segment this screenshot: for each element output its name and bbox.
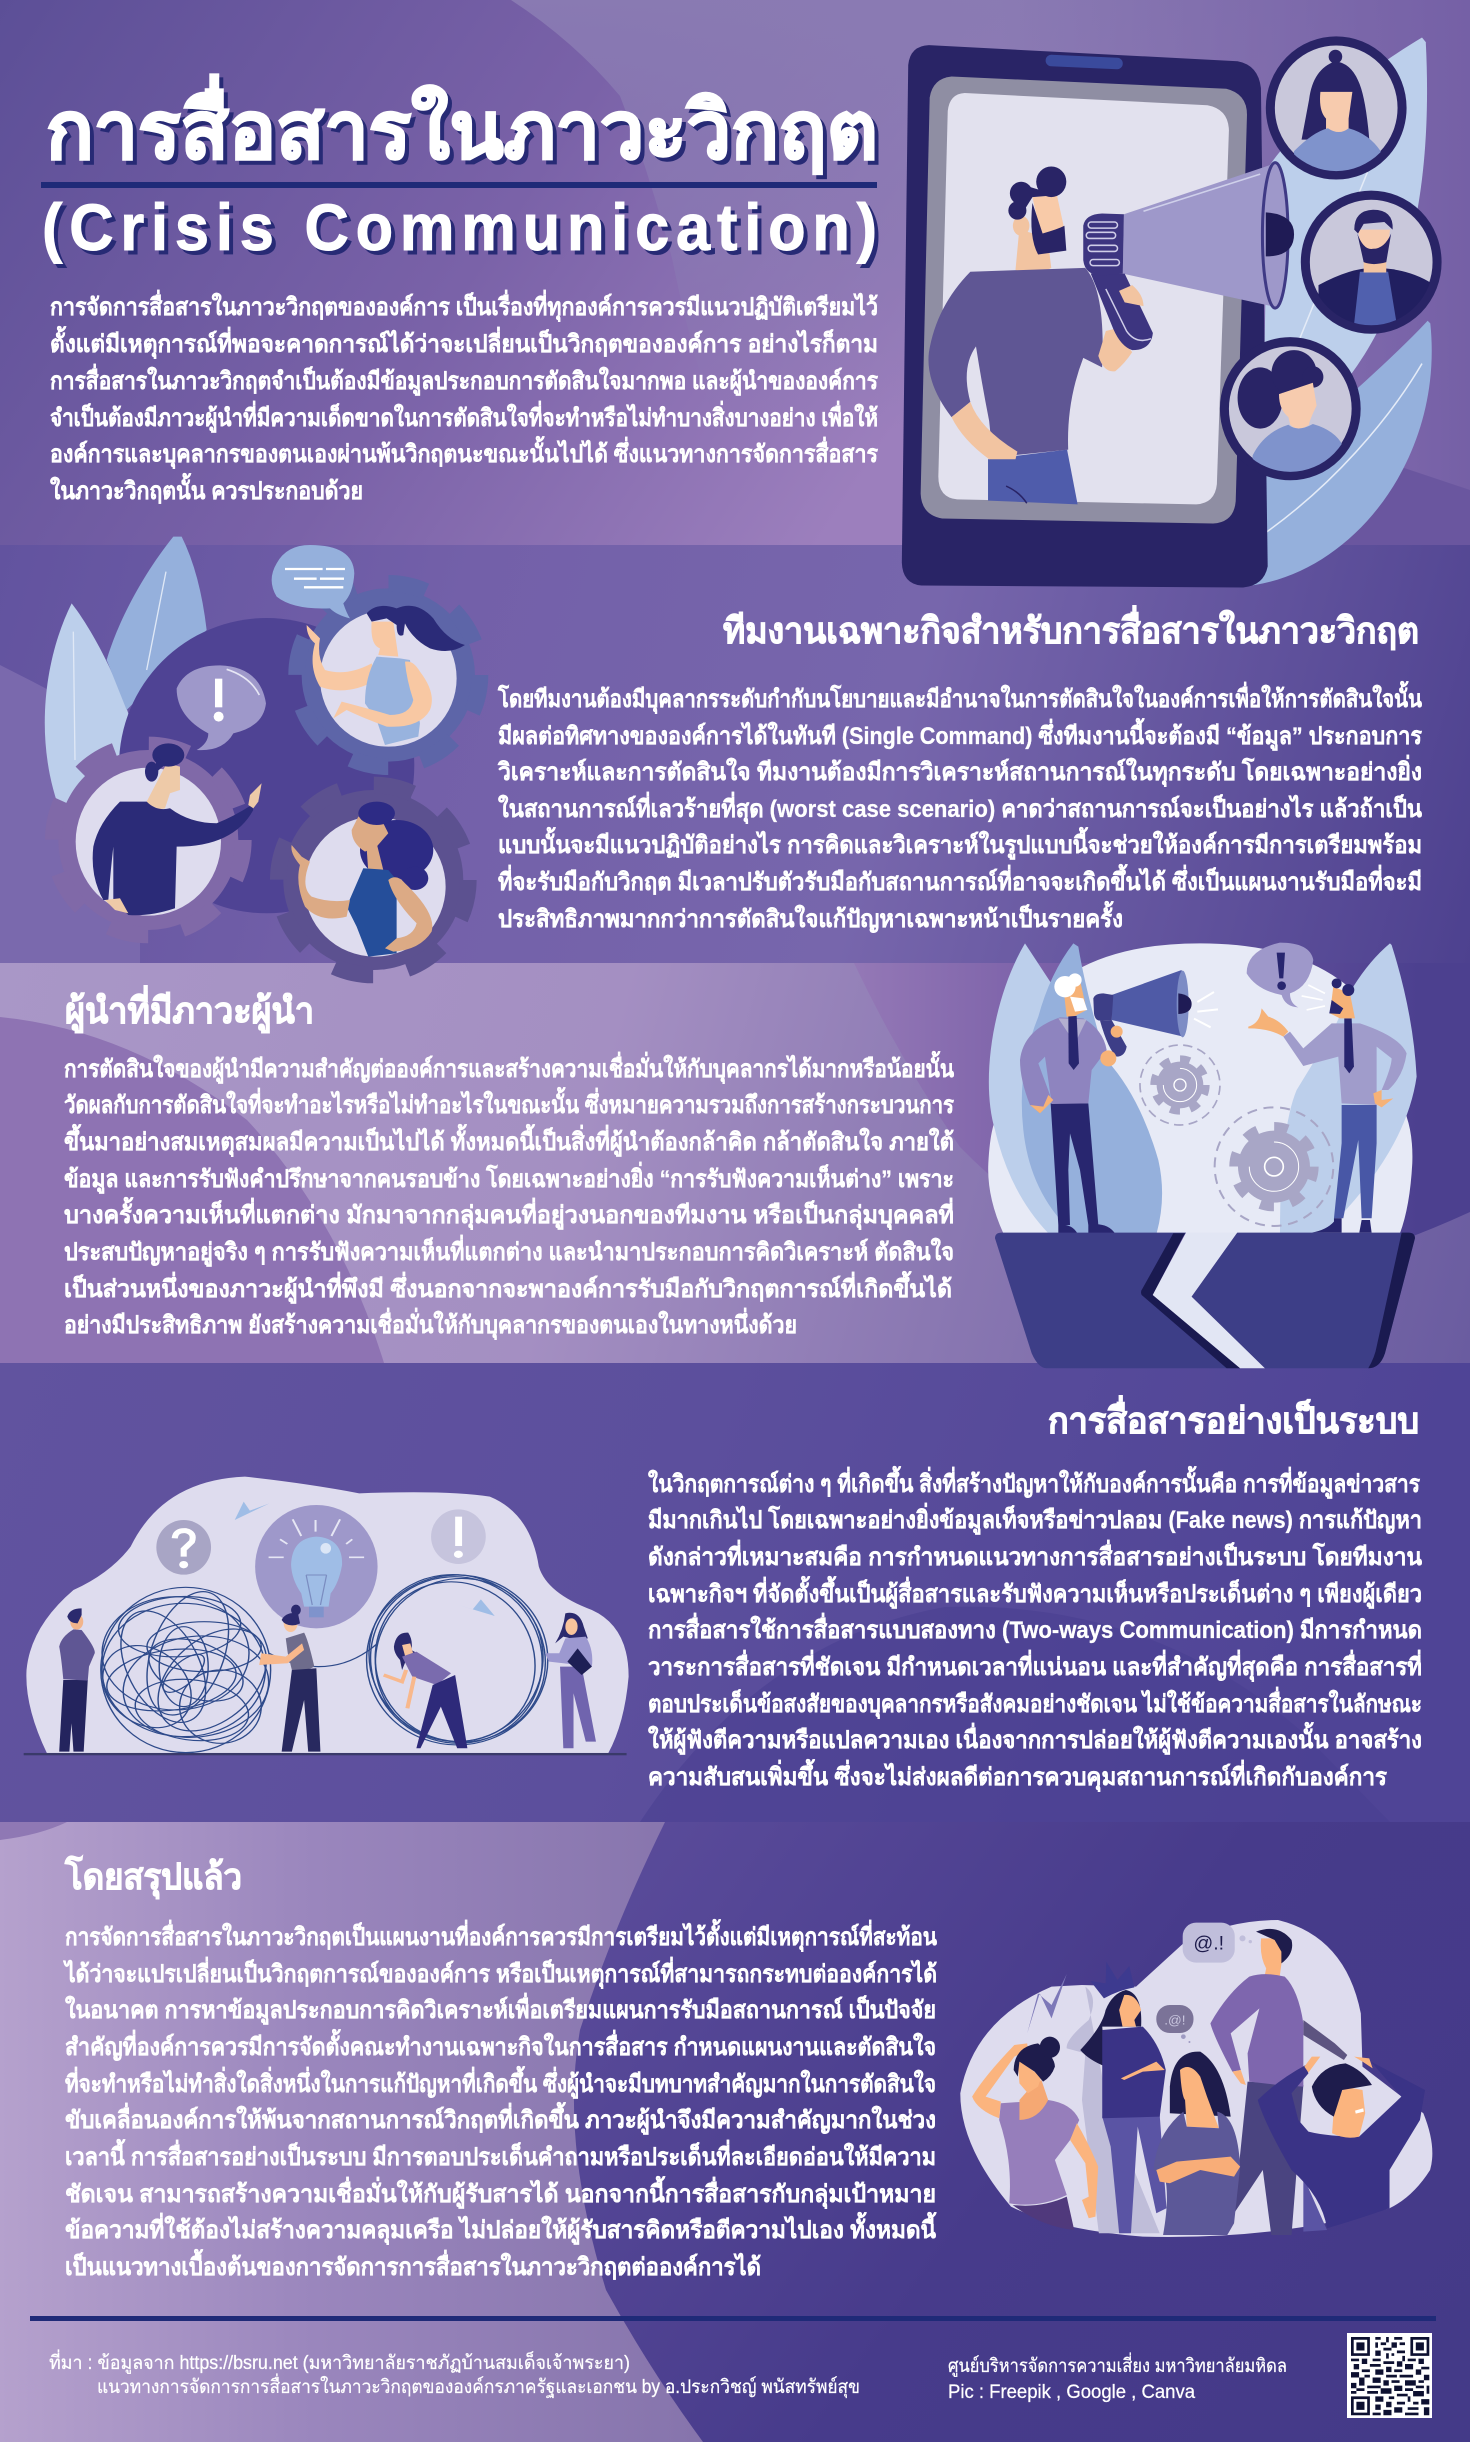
leadership text: อย่างมีประสิทธิภาพ ยังสร้างความเชื่อมั่นให้กับบุคลากรของตนเองในทางหนึ่งด้วย [64, 1307, 797, 1341]
team text: ประสิทธิภาพมากกว่าการตัดสินใจแก้ปัญหาเฉพาะหน้าเป็นรายครั้ง [498, 900, 1123, 933]
systematic text: วาระการสื่อสารที่ชัดเจน มีกำหนดเวลาที่แน่นอน และที่สำคัญที่สุดคือ การสื่อสารที่ [648, 1649, 1422, 1683]
person: woman pulling thread [259, 1605, 320, 1752]
credit text: ศูนย์บริหารจัดการความเสี่ยง มหาวิทยาลัยมหิดล [948, 2352, 1287, 2377]
systematic text: การสื่อสารใช้การสื่อสารแบบสองทาง (Two-ways Communication) มีการกำหนด [648, 1612, 1422, 1644]
title [42, 74, 878, 264]
intro text: ตั้งแต่มีเหตุการณ์ที่พอจะคาดการณ์ได้ว่าจะเปลี่ยนเป็นวิกฤตขององค์การ อย่างไรก็ตาม [50, 325, 878, 360]
intro text: การจัดการสื่อสารในภาวะวิกฤตขององค์การ เป็นเรื่องที่ทุกองค์การควรมีแนวปฏิบัติเตรียมไว้ [50, 289, 878, 323]
intro text: จำเป็นต้องมีภาวะผู้นำที่มีความเด็ดขาดในการตัดสินใจที่จะทำหรือไม่ทำบางสิ่งบางอย่าง เพื่อให้ [50, 400, 878, 433]
heading: ทีมงานเฉพาะกิจสำหรับการสื่อสารในภาวะวิกฤต [723, 605, 1419, 651]
credit text: Pic : Freepik , Google , Canva [948, 2382, 1195, 2403]
speech bubble: .@! [1164, 2013, 1186, 2028]
person: woman bending [384, 1633, 467, 1748]
leadership text: เป็นส่วนหนึ่งของภาวะผู้นำที่พึงมี ซึ่งนอกจากจะพาองค์การรับมือกับวิกฤตการณ์ที่เกิดขึ้นได้ [64, 1270, 952, 1304]
cracked platform [995, 1233, 1415, 1368]
icon: paper planes [235, 1502, 495, 1616]
panel: conclusion [62, 1855, 1432, 2281]
leadership text: ขึ้นมาอย่างสมเหตุสมผลมีความเป็นไปได้ ทั้งหมดนี้เป็นสิ่งที่ผู้นำต้องกล้าคิด กล้าตัดสินใจ ภายใต้ [64, 1123, 954, 1158]
person: tall man [1210, 1929, 1347, 2235]
source text: แนวทางการจัดการการสื่อสารในภาวะวิกฤตขององค์กรภาครัฐและเอกชน by อ.ประกวิชญ์ พนัสทรัพย์สุข [97, 2373, 860, 2399]
speech bubble [1247, 943, 1325, 1010]
intro text: ในภาวะวิกฤตนั้น ควรประกอบด้วย [50, 472, 363, 505]
credit text [948, 2352, 1287, 2403]
person one [93, 743, 262, 915]
leadership text: การตัดสินใจของผู้นำมีความสำคัญต่อองค์การและสร้างความเชื่อมั่นให้กับบุคลากรได้มากหรือน้อยนั้น [64, 1050, 955, 1085]
footer [30, 2316, 1436, 2418]
right man [1248, 978, 1407, 1233]
person three [291, 802, 433, 957]
panel: dedicated team [45, 537, 1423, 975]
conclusion text: การจัดการสื่อสารในภาวะวิกฤตเป็นแผนงานที่องค์การควรมีการเตรียมไว้ตั้งแต่มีเหตุการณ์ที่สะท้อน [65, 1918, 938, 1953]
speech bubble [1183, 1923, 1252, 1963]
QR code [1347, 2333, 1432, 2418]
person two [307, 606, 465, 745]
conclusion text: เวลานี้ การสื่อสารอย่างเป็นระบบ มีการตอบประเด็นคำถามหรือประเด็นที่ละเอียดอ่อนให้มีความ [65, 2138, 936, 2171]
large gear [1193, 1086, 1355, 1248]
conclusion text: ได้ว่าจะแปรเปลี่ยนเป็นวิกฤตการณ์ขององค์การ หรือเป็นเหตุการณ์ที่สามารถกระทบต่อองค์การได้ [62, 1956, 937, 1990]
leadership text: วัดผลกับการตัดสินใจที่จะทำอะไรหรือไม่ทำอะไรในขณะนั้น ซึ่งหมายความรวมถึงการสร้างกระบวนการ [64, 1086, 954, 1119]
team text [497, 680, 1423, 933]
person: man left [59, 1608, 95, 1752]
source text [49, 2349, 860, 2399]
leadership text: ข้อมูล และการรับฟังคำปรึกษาจากคนรอบข้าง โดยเฉพาะอย่างยิ่ง “การรับฟังความเห็นต่าง” เพราะ [64, 1161, 954, 1194]
coiled thread [354, 1564, 560, 1752]
conclusion text: สำคัญที่องค์การควรมีการจัดตั้งคณะทำงานเฉพาะกิจในการสื่อสาร กำหนดแผนงานและตัดสินใจ [65, 2028, 936, 2061]
panel: intro [41, 38, 1437, 587]
systematic text: ความสับสนเพิ่มขึ้น ซึ่งจะไม่ส่งผลดีต่อการควบคุมสถานการณ์ที่เกิดกับองค์การ [648, 1758, 1387, 1793]
icon: exclamation [431, 1509, 486, 1564]
systematic text: ดังกล่าวที่เหมาะสมคือ การกำหนดแนวทางการสื่อสารอย่างเป็นระบบ โดยทีมงาน [648, 1539, 1423, 1571]
conclusion text: ข้อความที่ใช้ต้องไม่สร้างความคลุมเครือ ไม่ปล่อยให้ผู้รับสารคิดหรือตีความไปเอง ทั้งหมดนี้ [65, 2211, 937, 2246]
person: woman with crown [1080, 1962, 1166, 2233]
conclusion text: เป็นแนวทางเบื้องต้นของการจัดการการสื่อสารในภาวะวิกฤตต่อองค์การได้ [65, 2248, 761, 2281]
person: woman arms crossed [1154, 2052, 1240, 2235]
intro text: องค์การและบุคลากรของตนเองผ่านพ้นวิกฤตนะขณะนั้นไปได้ ซึ่งแนวทางการจัดการสื่อสาร [50, 435, 878, 470]
heading: ผู้นำที่มีภาวะผู้นำ [65, 985, 314, 1034]
leadership text: บางครั้งความเห็นที่แตกต่าง มักมาจากกลุ่มคนที่อยู่วงนอกของทีมงาน หรือเป็นกลุ่มบุคคลที่ [64, 1196, 954, 1231]
speech bubble: @.! [1193, 1932, 1224, 1954]
illustration: leaders on a cracked platform [988, 943, 1417, 1368]
icon: lightning [1027, 1974, 1067, 2033]
heading: โดยสรุปแล้ว [64, 1855, 242, 1900]
speech bubble [1156, 2005, 1194, 2043]
person: man leaning [1258, 2057, 1425, 2232]
intro text [50, 289, 878, 505]
illustration: phone with megaphone and audience [902, 38, 1437, 587]
conclusion text: ขับเคลื่อนองค์การให้พ้นจากสถานการณ์วิกฤตที่เกิดขึ้น ภาวะผู้นำจึงมีความสำคัญมากในช่วง [65, 2101, 936, 2135]
leadership text [64, 1050, 955, 1341]
panel: systematic communication [24, 1395, 1423, 1793]
illustration: untangling communication [24, 1477, 629, 1759]
small gear [1129, 1034, 1231, 1136]
conclusion text: ชัดเจน สามารถสร้างความเชื่อมั่นให้กับผู้รับสารได้ นอกจากนี้การสื่อสารกับกลุ่มเป้าหมาย [65, 2175, 936, 2210]
person: woman holding head [972, 2037, 1098, 2230]
conclusion text: ที่จะทำหรือไม่ทำสิ่งใดสิ่งหนึ่งในการแก้ปัญหาที่เกิดขึ้น ซึ่งผู้นำจะมีบทบาทสำคัญมากในการตัดสินใจ [65, 2065, 936, 2099]
illustration: group of people [960, 1920, 1432, 2237]
source text: ที่มา : ข้อมูลจาก https://bsru.net (มหาวิทยาลัยราชภัฏบ้านสมเด็จเจ้าพระยา) [49, 2349, 630, 2374]
illustration: people in gears [45, 537, 480, 975]
icon: question mark [156, 1520, 211, 1575]
title: การสื่อสารในภาวะวิกฤต [46, 74, 878, 175]
conclusion text [62, 1918, 938, 2281]
systematic text [648, 1465, 1423, 1793]
systematic text: ให้ผู้ฟังตีความหรือแปลความเอง เนื่องจากการปล่อยให้ผู้ฟังตีความเองนั้น อาจสร้าง [648, 1721, 1422, 1755]
title: (Crisis Communication) [42, 190, 877, 264]
intro text: การสื่อสารในภาวะวิกฤตจำเป็นต้องมีข้อมูลประกอบการตัดสินใจมากพอ และผู้นำขององค์การ [50, 363, 878, 396]
person: woman with clipboard [545, 1613, 596, 1748]
tangled thread [75, 1581, 378, 1759]
title rule [41, 182, 877, 188]
heading: การสื่อสารอย่างเป็นระบบ [1048, 1395, 1419, 1441]
panel: leadership [64, 943, 1417, 1368]
leadership text: ประสบปัญหาอยู่จริง ๆ การรับฟังความเห็นที่แตกต่าง และนำมาประกอบการคิดวิเคราะห์ ตัดสินใจ [64, 1234, 954, 1267]
team text: วิเคราะห์และการตัดสินใจ ทีมงานต้องมีการวิเคราะห์สถานการณ์ในทุกระดับ โดยเฉพาะอย่างยิ่ง [498, 754, 1422, 788]
icon: light bulb [255, 1505, 378, 1628]
conclusion text: ในอนาคต การหาข้อมูลประกอบการคิดวิเคราะห์เพื่อเตรียมแผนการรับมือสถานการณ์ เป็นปัจจัย [65, 1992, 936, 2025]
left man with megaphone [1020, 970, 1192, 1233]
